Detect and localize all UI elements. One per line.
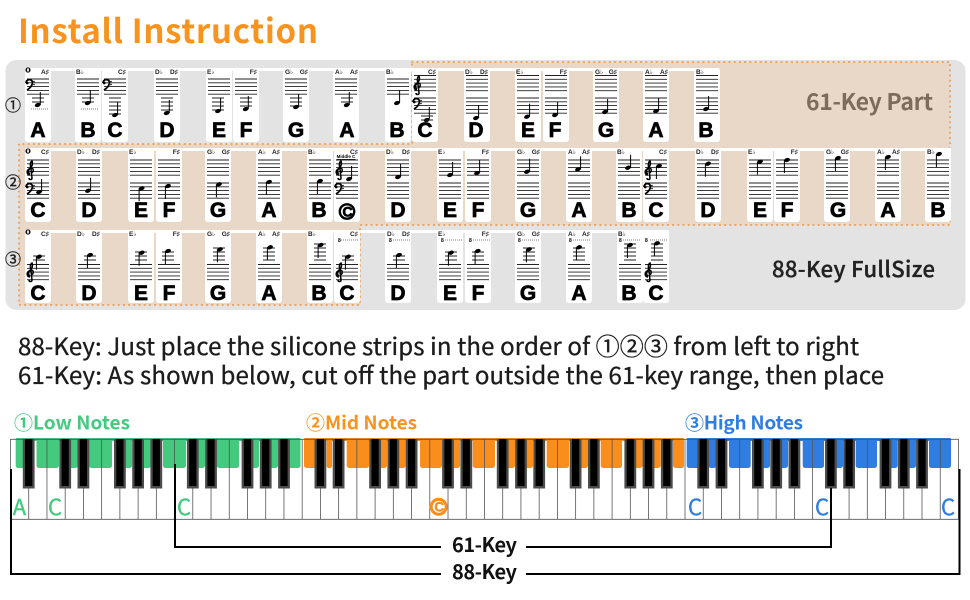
strip F: F <box>781 199 794 222</box>
strip C: C <box>30 199 46 222</box>
strip B: B <box>80 119 96 142</box>
strip F <box>233 68 259 142</box>
strip E <box>437 230 463 305</box>
strip F: F♯ <box>560 69 567 76</box>
strip middle C: C♯ <box>350 149 358 156</box>
strip G: 8 <box>518 238 521 244</box>
strip D: D <box>81 282 97 305</box>
bracket: 61-key range <box>175 464 831 558</box>
panel: silicone strip layout <box>5 60 966 310</box>
strip B <box>616 148 642 222</box>
strip E: E <box>753 199 767 222</box>
strip C: C♯ <box>41 149 49 156</box>
key label: middle C <box>431 499 446 514</box>
strip C <box>25 148 51 222</box>
strip D: D <box>700 199 716 222</box>
strip C: C <box>339 282 355 305</box>
black keys <box>23 439 928 488</box>
strip row 2 <box>25 148 951 222</box>
key labels: blue: C <box>941 490 955 522</box>
strip G: G♯ <box>222 149 230 156</box>
label: 88-Key FullSize: 88-Key FullSize <box>772 252 935 284</box>
strip G: G♯ <box>532 231 540 238</box>
strip F: F♯ <box>791 149 798 156</box>
key labels: blue <box>688 490 955 522</box>
strip B <box>694 68 720 142</box>
strip G <box>283 68 309 142</box>
line: 61-key instruction: 61-Key: As shown below, cut off the part outside the 61-key range, then place <box>18 356 884 391</box>
strip G: G <box>520 199 536 222</box>
strip E: E <box>443 199 457 222</box>
strip B: B♭ <box>308 231 316 238</box>
panel: 61-key region <box>19 62 950 305</box>
strip D: D <box>81 199 97 222</box>
strip E: E♭ <box>516 69 523 76</box>
strip C: C♯ <box>659 149 667 156</box>
heading: high notes: ③High Notes <box>685 408 803 436</box>
strip A: A♯ <box>660 69 668 76</box>
strip D: D <box>390 199 406 222</box>
green low-note silicone strip <box>16 438 301 468</box>
strip D: D♯ <box>402 231 410 238</box>
strip row 3 <box>25 229 669 305</box>
strip G: G <box>598 119 614 142</box>
strip B: B <box>621 199 637 222</box>
strip D <box>76 230 102 305</box>
strip G: G <box>288 119 304 142</box>
row number 2: ② <box>5 169 21 193</box>
strip F <box>156 230 182 305</box>
strip D: D♯ <box>711 149 719 156</box>
strip A <box>25 67 51 142</box>
strip A: A♯ <box>41 69 49 76</box>
strip A: A <box>571 282 587 305</box>
strip B: B♭ <box>618 231 626 238</box>
strip C: C♯ <box>428 69 436 76</box>
strip F: F♯ <box>173 231 180 238</box>
strip B: B <box>698 119 714 142</box>
strip F: F♯ <box>482 149 489 156</box>
strip E: E♭ <box>129 231 136 238</box>
strip C <box>334 230 360 305</box>
bracket: 88-key range <box>11 469 960 585</box>
strip F <box>156 148 182 222</box>
strip D: D♭ <box>465 69 473 76</box>
strip E: E <box>521 119 535 142</box>
strip middle C <box>334 148 360 222</box>
strip E: 8 <box>441 238 444 244</box>
strip G <box>205 148 231 222</box>
strip F <box>543 68 569 142</box>
strip C: C♯ <box>118 69 126 76</box>
strip A: A♯ <box>272 231 280 238</box>
orange mid-note silicone strip <box>304 438 684 468</box>
strip D: D♭ <box>155 69 163 76</box>
strip D: D♭ <box>696 149 704 156</box>
strip F <box>465 148 491 222</box>
strip F: F <box>163 199 176 222</box>
strip E: E♭ <box>129 149 136 156</box>
strip A: A♭ <box>877 149 885 156</box>
strip A: A♭ <box>335 69 343 76</box>
strip D <box>695 148 721 222</box>
strip F: F♯ <box>173 149 180 156</box>
strip D <box>385 148 411 222</box>
title: Install Instruction <box>18 5 318 53</box>
strip D <box>154 68 180 142</box>
strip A: A <box>261 282 277 305</box>
strip G <box>593 68 619 142</box>
strip G: G♯ <box>300 69 308 76</box>
strip F: F <box>549 119 562 142</box>
key labels: green: C <box>177 490 191 522</box>
strip middle C: C <box>342 204 353 220</box>
strip E <box>437 148 463 222</box>
strip G <box>205 230 231 305</box>
strip A: A♯ <box>272 149 280 156</box>
strip B: B <box>311 199 327 222</box>
strip C: C <box>648 282 664 305</box>
strip G: G♭ <box>517 149 525 156</box>
strip D: D♯ <box>92 231 100 238</box>
strip C: C <box>30 282 46 305</box>
strip A: A♭ <box>645 69 653 76</box>
strip D: D♯ <box>170 69 178 76</box>
strip E <box>128 230 154 305</box>
strip G <box>824 148 850 222</box>
strip B: B♭ <box>386 69 394 76</box>
strip D <box>464 68 490 142</box>
strip G: G <box>210 282 226 305</box>
strip D: D <box>390 282 406 305</box>
strip B <box>307 148 333 222</box>
label: 61-Key Part: 61-Key Part <box>806 83 933 117</box>
strip F: 8 <box>469 238 472 244</box>
strip A: A <box>30 119 46 142</box>
strip D: D♯ <box>92 149 100 156</box>
strip D: D♯ <box>402 149 410 156</box>
strip D: D♭ <box>77 149 85 156</box>
row number 3: ③ <box>5 246 21 270</box>
strip G: G♯ <box>222 231 230 238</box>
strip F: F♯ <box>482 231 489 238</box>
strip A <box>875 148 901 222</box>
strip B <box>75 68 101 142</box>
key labels: green <box>13 490 191 522</box>
key labels: green: C <box>48 490 62 522</box>
label: 61-Key: 61-Key <box>452 529 518 558</box>
strip A: A♯ <box>582 231 590 238</box>
strip G <box>515 148 541 222</box>
strip E: E <box>212 119 226 142</box>
strip B: B♭ <box>927 149 935 156</box>
row number 1: ① <box>5 92 21 116</box>
strip F: F <box>163 282 176 305</box>
strip G: G <box>830 199 846 222</box>
strip A: A♭ <box>258 231 266 238</box>
strip A: A <box>648 119 664 142</box>
strip A <box>333 68 359 142</box>
strip G: G <box>210 199 226 222</box>
piano keyboard <box>10 438 958 522</box>
strip F: F <box>472 282 485 305</box>
strip G: G♭ <box>285 69 293 76</box>
strip C <box>643 148 669 222</box>
strip G: G♯ <box>609 69 617 76</box>
strip D: D♭ <box>386 149 394 156</box>
key labels: blue: C <box>815 490 829 522</box>
strip B: B <box>621 282 637 305</box>
strip C: C <box>417 119 433 142</box>
strip E <box>747 148 773 222</box>
strip F <box>774 148 800 222</box>
strip A: A♭ <box>258 149 266 156</box>
strip E: E <box>134 199 148 222</box>
strip A: A <box>339 119 355 142</box>
strip C <box>102 68 128 142</box>
strip C <box>643 230 669 305</box>
strip G: G♭ <box>826 149 834 156</box>
heading: low notes: ①Low Notes <box>14 408 130 436</box>
strip A <box>256 230 282 305</box>
strip F: F♯ <box>250 69 257 76</box>
strip D: D♭ <box>387 231 395 238</box>
instruction text <box>18 327 884 391</box>
strip B: B <box>389 119 405 142</box>
strip G: G♭ <box>517 231 525 238</box>
strip D <box>76 148 102 222</box>
strip D: D♭ <box>77 231 85 238</box>
strip A: A <box>880 199 896 222</box>
strip E: E♭ <box>438 231 445 238</box>
strip B <box>925 148 951 222</box>
strip E <box>515 68 541 142</box>
line: 88-key instruction: 88-Key: Just place the silicone strips in the order of ①②③ from left to right <box>18 327 859 362</box>
strip A: 8 <box>569 238 572 244</box>
strip E <box>128 148 154 222</box>
strip A <box>566 230 592 305</box>
strip A: A <box>261 199 277 222</box>
strip D: D♯ <box>480 69 488 76</box>
strip G: G♯ <box>532 149 540 156</box>
strip C <box>25 229 51 305</box>
blue high-note silicone strip <box>687 438 951 468</box>
strip E: E <box>134 282 148 305</box>
strip row 1 <box>25 67 720 142</box>
strip F: F <box>472 199 485 222</box>
strip C: C <box>107 119 123 142</box>
strip B: B <box>311 282 327 305</box>
strip F: F <box>240 119 253 142</box>
strip B: B♭ <box>696 69 704 76</box>
strip D <box>385 230 411 305</box>
strip A: A♭ <box>568 231 576 238</box>
strip C <box>412 68 438 142</box>
strip D: 8 <box>389 238 392 244</box>
strip A <box>643 68 669 142</box>
strip C: 8 <box>645 238 648 244</box>
strip E: E♭ <box>438 149 445 156</box>
strip F <box>465 230 491 305</box>
strip E: E <box>443 282 457 305</box>
strip A: A♯ <box>582 149 590 156</box>
label: 88-Key: 88-Key <box>452 556 518 585</box>
strip G: G♭ <box>207 231 215 238</box>
strip middle C: Middle C <box>337 154 356 159</box>
strip B: 8 <box>619 238 622 244</box>
strip B <box>617 230 643 305</box>
dotted outline: 61-key part <box>19 62 950 305</box>
strip E: E♭ <box>207 69 214 76</box>
strip A: A♯ <box>892 149 900 156</box>
strip G: G♭ <box>595 69 603 76</box>
strip C: 8 <box>338 238 341 244</box>
strip D: D <box>468 119 484 142</box>
strip E: E♭ <box>748 149 755 156</box>
strip G: G♯ <box>841 149 849 156</box>
strip A: A♭ <box>568 149 576 156</box>
strip D: D <box>159 119 175 142</box>
strip B <box>307 230 333 305</box>
strip A <box>566 148 592 222</box>
strip B: B <box>930 199 946 222</box>
white key outlines <box>10 439 958 519</box>
strip A: A♯ <box>350 69 358 76</box>
key labels: green: A <box>13 490 27 522</box>
strip A: A <box>571 199 587 222</box>
strip C: C <box>648 199 664 222</box>
key label: middle C: C <box>434 500 444 514</box>
key labels: blue: C <box>688 490 702 522</box>
strip B: B♭ <box>308 149 316 156</box>
strip G: G <box>520 282 536 305</box>
strip C: C♯ <box>41 231 49 238</box>
strip G: G♭ <box>207 149 215 156</box>
strip A <box>256 148 282 222</box>
strip B: B♭ <box>617 149 625 156</box>
strip B <box>385 68 411 142</box>
strip G <box>515 230 541 305</box>
strip C: C♯ <box>350 231 358 238</box>
strip E <box>206 68 232 142</box>
heading: mid notes: ②Mid Notes <box>306 408 417 436</box>
strip B: B♭ <box>76 69 84 76</box>
